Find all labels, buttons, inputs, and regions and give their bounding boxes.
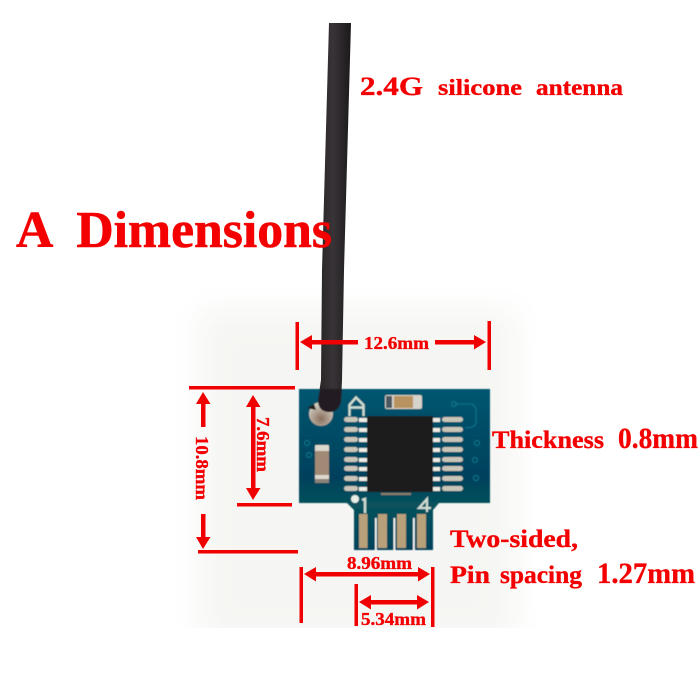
pin spacing label [450,557,695,590]
antenna label [360,72,624,101]
chip body [367,416,433,492]
photo background [200,310,515,640]
top capacitor [385,395,422,409]
left capacitor [315,445,329,483]
pin spacing label: Pin [450,562,490,589]
dimension: 7.6mm height: 7.6mm [253,417,273,472]
dimension: 5.34mm width: 5.34mm [361,609,426,629]
antenna label: silicone [438,75,522,100]
dimension: 8.96mm width: 8.96mm [347,553,412,573]
pin spacing label: spacing [500,562,582,589]
left chip pins [344,417,367,491]
letter A marking [350,398,364,416]
dimension: 7.6mm height [237,395,292,506]
dimension: 5.34mm width [354,584,429,629]
thickness label: Thickness [492,427,604,454]
dimension: 10.8mm height: 10.8mm [192,436,212,500]
right chip pins [433,417,463,491]
title: A Dimensions [16,202,332,259]
solder spike [307,404,316,410]
gold connector pads [359,514,426,548]
thickness label [492,422,698,455]
two-sided label: Two-sided, [450,526,578,553]
traces and vias [304,402,480,480]
antenna end over pad [318,389,342,412]
board outline [299,389,490,550]
antenna label: antenna [536,75,624,100]
dimension: 10.8mm height [189,386,298,554]
white slits [375,518,415,550]
pin labels [362,499,431,513]
dimension: 12.6mm width: 12.6mm [364,333,429,353]
pin one dot [351,495,359,503]
solder pad [309,402,333,426]
dimension: 12.6mm width [296,321,491,370]
pin spacing label: 1.27mm [597,557,695,590]
antenna cable [318,23,351,412]
chip bottom mark [381,493,411,495]
circuit board module [299,389,490,550]
antenna label: 2.4G [360,72,423,101]
dimension: 8.96mm width [300,553,434,627]
